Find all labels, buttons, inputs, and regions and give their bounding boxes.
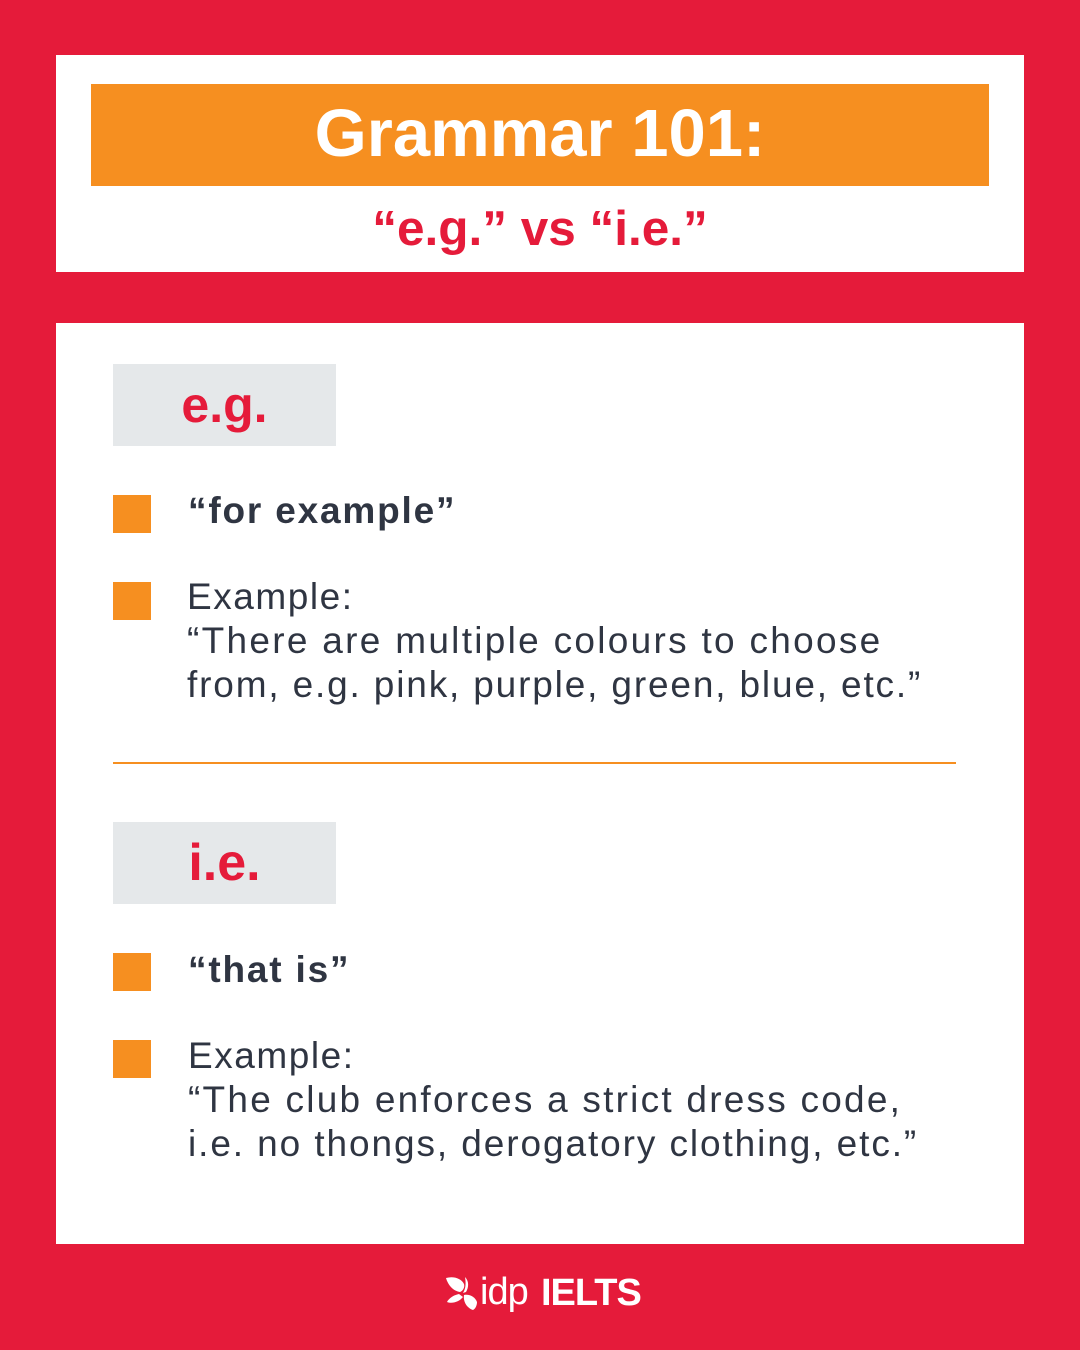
example text: i.e. no thongs, derogatory clothing, etc.” [188,1123,918,1164]
bullet [113,953,151,991]
example text: from, e.g. pink, purple, green, blue, etc.” [187,664,922,705]
example text: “The club enforces a strict dress code, [188,1079,902,1120]
icon: idp leaf mark [446,1277,477,1310]
divider [113,762,956,764]
header panel [56,55,1024,272]
tag: e.g.: e.g. [181,377,268,433]
bullet [113,495,151,533]
example text [188,1035,918,1164]
example text: Example: [188,1035,355,1076]
meaning: “for example” [188,490,456,531]
tag: i.e.: i.e. [188,834,261,892]
section: i.e. [113,822,918,1164]
title banner: Grammar 101: [315,96,765,171]
tag: i.e. [113,822,336,904]
section: e.g. [113,364,922,705]
bullet [113,1040,151,1078]
meaning: “that is” [188,949,350,990]
example text [187,576,922,705]
tag: e.g. [113,364,336,446]
logo text: IELTS: IELTS [541,1272,641,1314]
subtitle: “e.g.” vs “i.e.” [372,201,708,256]
title banner [91,84,989,186]
logo text: idp: idp [480,1271,528,1313]
example text: “There are multiple colours to choose [187,620,883,661]
logo: idp IELTS [446,1271,641,1314]
example text: Example: [187,576,354,617]
main panel [56,323,1024,1244]
bullet [113,582,151,620]
